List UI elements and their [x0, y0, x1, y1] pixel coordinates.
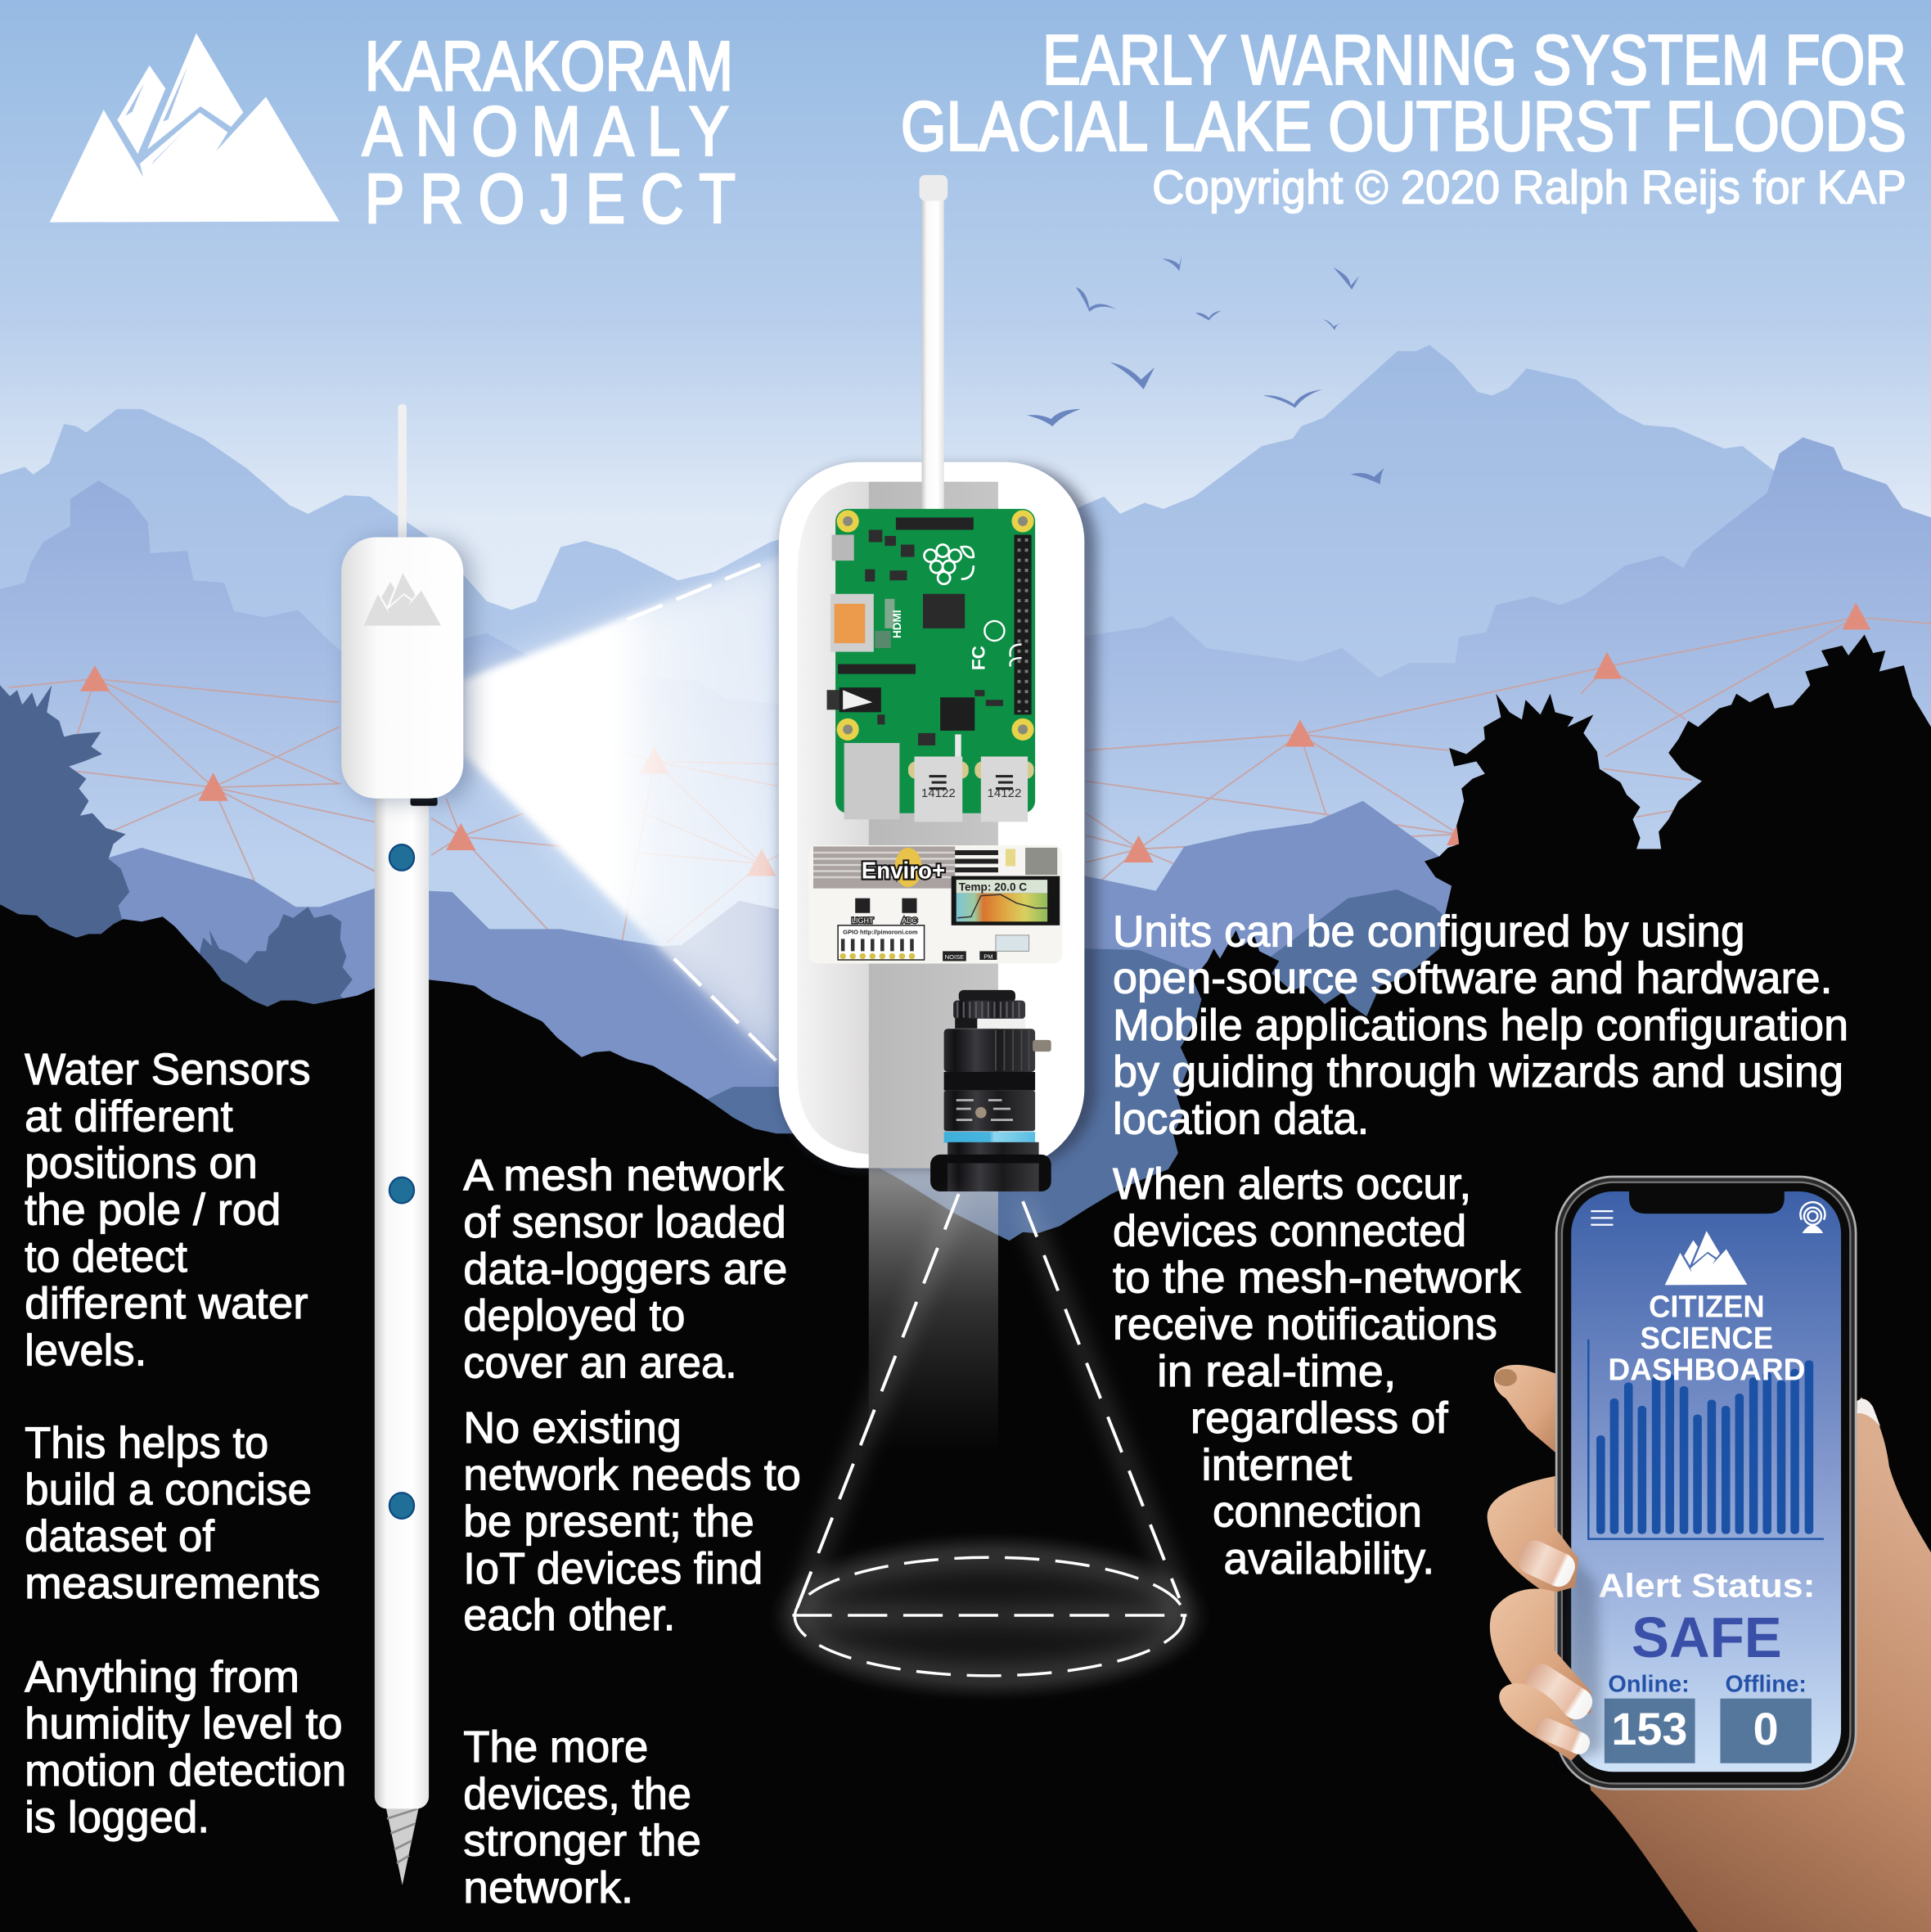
mounting hole centers [843, 516, 1028, 734]
SCIENCE: SCIENCE [1641, 1321, 1773, 1355]
front range [50, 97, 340, 223]
text: alerts [1113, 1160, 1521, 1583]
paragraph 1: the pole / rod [25, 1186, 281, 1235]
HDMI label: HDMI [891, 610, 903, 638]
panel shadow [781, 466, 1096, 1168]
online count: 153 [1611, 1704, 1687, 1754]
gas sensor [996, 935, 1029, 951]
ethernet port [844, 743, 899, 819]
notch [1629, 1189, 1785, 1214]
mid mountains left [0, 480, 789, 986]
white mark [977, 1019, 1025, 1029]
USB port 2: 14122 [988, 786, 1021, 800]
little nail [1533, 1715, 1593, 1758]
small chips [865, 529, 1003, 757]
Enviro+ sensor board [808, 845, 1062, 963]
paragraph 1: different water [25, 1279, 308, 1328]
node triangles [80, 602, 1870, 876]
text: configuration: Mobile applications help configuration [1113, 1001, 1848, 1050]
menu icon [1591, 1211, 1613, 1225]
GPIO block: GPIO http://pimoroni.com [843, 928, 918, 935]
focus ring [944, 1072, 1035, 1091]
LED [1006, 849, 1015, 867]
paragraph 1: Water Sensors [25, 1045, 311, 1094]
antenna cap [920, 175, 947, 200]
strip fading below panel [869, 1168, 998, 1452]
middle finger [1488, 1476, 1578, 1594]
water sensor top [389, 844, 414, 871]
beam dashed edges [628, 563, 779, 1063]
bird [1263, 390, 1322, 408]
text: mesh network [463, 1151, 801, 1912]
aperture ring [944, 1091, 1035, 1131]
camera lens [930, 990, 1051, 1191]
NOISE label [943, 951, 966, 961]
paragraph 3 [463, 1723, 701, 1912]
dark ridge beneath the panel [704, 889, 1466, 1250]
CITIZEN: CITIZEN [1649, 1290, 1765, 1324]
background mountains [0, 345, 1931, 986]
certification marks [984, 621, 1022, 667]
lens specs [956, 1099, 1013, 1121]
paragraph 1: at different [25, 1092, 233, 1141]
top cap [959, 990, 1015, 1002]
paragraph 2: IoT devices find [463, 1544, 763, 1593]
paragraph 2: network needs to [463, 1450, 801, 1499]
paragraph 3: Anything from [25, 1652, 299, 1701]
cone glow [792, 1194, 1186, 1676]
far mountains left [0, 409, 813, 986]
spike thread [387, 1808, 418, 1863]
display temp text: Temp: 20.0 C [959, 881, 1027, 894]
middle nail [1514, 1536, 1579, 1592]
PCB [835, 509, 1035, 813]
GPIO header [1014, 534, 1032, 714]
finger shadows on screen [1565, 1552, 1602, 1764]
body ribs [996, 1030, 1029, 1070]
bird [1162, 255, 1182, 271]
paragraph 3: is logged. [25, 1793, 209, 1842]
paragraph 1: data-loggers are [463, 1245, 787, 1294]
text: alerts: When alerts occur, [1113, 1160, 1471, 1209]
ADC: ADC [902, 916, 917, 925]
offline count: 0 [1753, 1704, 1779, 1754]
bird [1334, 268, 1359, 290]
display [952, 876, 1060, 925]
text: configuration: location data. [1113, 1094, 1369, 1143]
bird [1027, 409, 1081, 426]
online label: Online: [1608, 1671, 1690, 1697]
GPIO pins [1020, 538, 1027, 712]
small dark blue tree [185, 907, 358, 1011]
bars [1596, 1360, 1813, 1534]
enclosure logo [363, 573, 441, 626]
right ridge [1072, 801, 1479, 1245]
palm and thumb [1578, 1398, 1931, 1932]
light sensor [852, 898, 874, 925]
SD card label [835, 604, 865, 643]
paragraph 3: network. [463, 1863, 633, 1912]
SD card [830, 594, 874, 652]
paragraph 1: to detect [25, 1232, 187, 1281]
text: alerts: in real-time, [1157, 1347, 1396, 1396]
paragraph 2: each other. [463, 1591, 675, 1640]
text: alerts: connection [1213, 1488, 1422, 1537]
LAN chip [940, 697, 975, 731]
ring nail [1520, 1659, 1597, 1725]
paragraph 2 [25, 1418, 321, 1608]
light beam from sensor to detail panel [463, 553, 789, 1076]
broadcast icon [1800, 1202, 1825, 1232]
logo wordmark [362, 27, 736, 237]
main body [944, 1029, 1035, 1072]
bird [1195, 310, 1222, 320]
hand holding phone [1488, 1177, 1931, 1932]
text: alerts: availability. [1224, 1534, 1434, 1583]
lower body step [947, 1155, 1039, 1163]
online count [1605, 1699, 1695, 1763]
ring finger [1490, 1588, 1591, 1723]
ANOMALY: ANOMALY [362, 92, 729, 170]
text: alerts: devices connected [1113, 1206, 1466, 1255]
paragraph 3: motion detection [25, 1746, 346, 1795]
paragraph 3: stronger the [463, 1817, 701, 1866]
paragraph 3: The more [463, 1723, 648, 1772]
offline label: Offline: [1725, 1671, 1807, 1697]
yellow drop behind label [894, 848, 922, 887]
phone inner ring [1562, 1182, 1850, 1784]
spike tip [385, 1806, 419, 1885]
paragraph 1: levels. [25, 1326, 146, 1375]
copyright: Copyright © 2020 Ralph Reijs for KAP [1152, 161, 1906, 214]
gold pins [839, 953, 915, 959]
title [901, 20, 1906, 214]
beam [463, 553, 789, 1076]
GPIO block [838, 925, 925, 960]
text: configuration: open-source software and hardware. [1113, 954, 1833, 1003]
FC mark: FC [968, 646, 988, 670]
antenna [922, 185, 944, 511]
pole [375, 789, 429, 1808]
lower body [947, 1142, 1039, 1191]
paragraph 1: positions on [25, 1138, 258, 1187]
main peak [147, 34, 243, 150]
alert status: Alert Status: [1598, 1566, 1815, 1604]
paragraph 2: No existing [463, 1403, 682, 1452]
index fingertip [1495, 1369, 1517, 1386]
paragraph 1: of sensor loaded [463, 1198, 786, 1247]
memory chip [923, 594, 965, 628]
display heat chart [956, 894, 1047, 921]
display temp row [956, 880, 1047, 894]
water sensor middle [389, 1178, 414, 1203]
logo: mountain [50, 34, 340, 223]
mid-ground blue ridges [0, 685, 1479, 1250]
ellipse soft glow [767, 1533, 1211, 1700]
KARAKORAM: KARAKORAM [365, 27, 733, 106]
paragraph 1 [25, 1045, 311, 1375]
antenna [398, 404, 407, 540]
raspberry logo [925, 545, 974, 584]
text: alerts: receive notifications [1113, 1300, 1497, 1349]
left shard [117, 65, 165, 154]
Raspberry Pi board [827, 509, 1035, 822]
axes [1588, 1340, 1824, 1539]
detail panel [779, 175, 1096, 1191]
text: configuration [1113, 907, 1848, 1143]
paragraph 1: cover an area. [463, 1338, 737, 1387]
text: water sensors [25, 1045, 346, 1842]
panel body [779, 462, 1084, 1168]
bird [1110, 363, 1155, 390]
NOISE label: NOISE [945, 953, 964, 961]
micro USB [832, 534, 854, 561]
paragraph 1: A mesh network [463, 1151, 785, 1200]
audio jack [827, 687, 881, 712]
base ellipse [794, 1557, 1184, 1676]
paragraph 1: deployed to [463, 1291, 685, 1340]
text: configuration: Units can be configured by using [1113, 907, 1745, 956]
lens screw [975, 1107, 987, 1118]
enclosure [341, 538, 463, 799]
foreground black ground and trees [0, 634, 1931, 1932]
bird [1076, 287, 1116, 312]
cone dashed edges [796, 1194, 1179, 1610]
bird [1351, 468, 1384, 484]
black tab [411, 797, 438, 806]
top right components [955, 853, 998, 870]
bar chart [1588, 1340, 1824, 1539]
striped top half [813, 846, 955, 889]
camera connector [896, 517, 974, 529]
text: alerts: internet [1201, 1440, 1352, 1489]
PM label [979, 951, 997, 960]
sensor pole [341, 404, 472, 1885]
paragraph 2: be present; the [463, 1497, 754, 1547]
ADC [902, 898, 917, 925]
cone of light field of view [767, 1194, 1211, 1700]
bird [1324, 319, 1341, 331]
fingers over phone [1488, 1476, 1602, 1764]
side knob [1033, 1040, 1051, 1052]
paragraph 3: humidity level to [25, 1700, 343, 1749]
mini mountain logo [1665, 1231, 1747, 1285]
little finger [1499, 1683, 1590, 1761]
ribbed ring [953, 1001, 1025, 1019]
beam glow [463, 561, 779, 1060]
paragraph 2: This helps to [25, 1418, 268, 1467]
light sensor: LIGHT [852, 916, 874, 925]
base line [792, 1615, 1186, 1616]
dark mark [955, 1019, 977, 1029]
paragraph 1 [463, 1151, 787, 1387]
birds [1027, 255, 1384, 484]
phone bezel [1556, 1177, 1856, 1789]
text: alerts: to the mesh-network [1113, 1254, 1521, 1303]
USB port 1 [908, 757, 969, 822]
PM label: PM [984, 952, 993, 960]
water sensor bottom [389, 1493, 414, 1519]
app title [1608, 1290, 1805, 1386]
mesh network lines and sensor nodes [9, 602, 1931, 943]
paragraph 3: devices, the [463, 1769, 691, 1818]
text: alerts: regardless of [1191, 1394, 1449, 1443]
left ridge [0, 848, 813, 1183]
paragraph 2 [463, 1403, 801, 1640]
paragraph 2: dataset of [25, 1512, 215, 1561]
mounting holes [837, 510, 1034, 741]
paragraph 3 [25, 1652, 346, 1842]
far mountains right [1072, 345, 1931, 986]
thumb nail [1857, 1399, 1880, 1427]
inner left shade [797, 482, 875, 1168]
paragraph 2: build a concise [25, 1466, 312, 1515]
Enviro+ label: Enviro+ [862, 858, 945, 885]
black base [930, 1155, 1051, 1191]
SAFE: SAFE [1632, 1605, 1782, 1669]
heat trend line [957, 894, 1047, 918]
board [808, 845, 1062, 963]
enclosure shadow [349, 540, 472, 801]
display connector [838, 664, 916, 674]
header edge [1025, 848, 1057, 875]
index finger behind phone [1494, 1365, 1560, 1457]
stripes [813, 853, 955, 877]
blue band [944, 1132, 1035, 1142]
PROJECT: PROJECT [365, 159, 736, 237]
paragraph 2: measurements [25, 1559, 321, 1608]
USB port 2 [975, 757, 1034, 822]
ring ribs [957, 1002, 1020, 1018]
offline count [1720, 1699, 1812, 1763]
screen [1571, 1191, 1841, 1772]
mesh lines [9, 617, 1931, 943]
dark blue tree left [0, 685, 129, 955]
phone [1556, 1177, 1856, 1789]
USB port 1: 14122 [921, 786, 956, 800]
text: configuration: by guiding through wizards and using [1113, 1047, 1843, 1097]
center strip [869, 482, 998, 1168]
mid mountains right [1078, 438, 1931, 986]
DASHBOARD: DASHBOARD [1608, 1352, 1805, 1386]
glacier slits [125, 66, 187, 165]
